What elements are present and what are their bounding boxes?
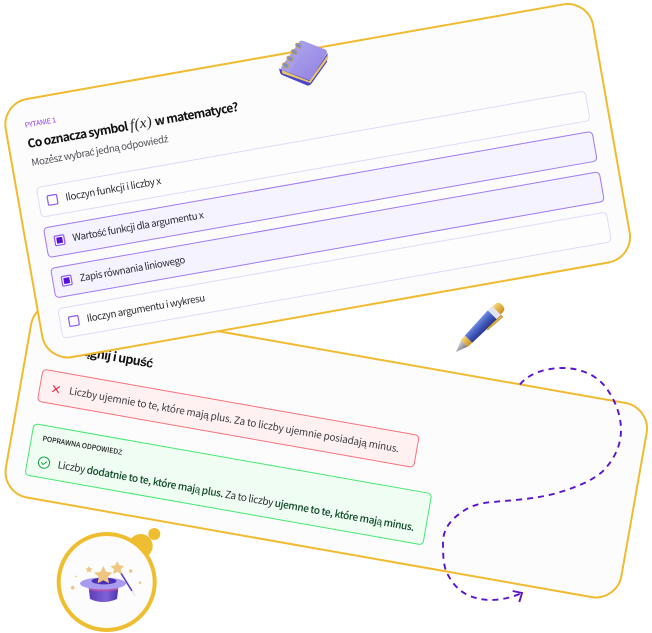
question title: Co oznacza symbol <box>26 117 130 152</box>
correct answer box <box>25 424 432 545</box>
icon: red cross <box>52 385 60 393</box>
correct answer label: POPRAWNA ODPOWIEDŹ <box>42 434 124 458</box>
correct answer text: Liczby dodatnie to te, które mają plus. Za to liczby ujemne to te, które mają minus. <box>57 456 416 534</box>
option 3 selected <box>51 172 604 298</box>
checkbox checked <box>54 235 65 246</box>
option 4 <box>58 212 611 338</box>
question title: f(x) <box>129 114 153 134</box>
question hint: Możesz wybrać jedną odpowiedź <box>30 131 170 169</box>
panel: question card <box>1 0 634 362</box>
option 2 selected <box>43 131 597 258</box>
checkbox empty <box>47 194 58 205</box>
option 1 text: Iloczyn funkcji i liczby x <box>64 173 162 204</box>
option 2 text: Wartość funkcji dla argumentu x <box>71 207 205 244</box>
question title: w matematyce? <box>153 98 240 130</box>
checkbox empty <box>68 315 79 327</box>
icon: hat and stars <box>71 561 141 602</box>
wrong answer text: Liczby ujemnie to te, które mają plus. Za to liczby ujemnie posiadają minus. <box>68 382 401 455</box>
icon: pen <box>451 300 509 358</box>
badge blob small <box>148 528 160 540</box>
icon: notebook <box>279 41 328 85</box>
option 3 text: Zapis równania liniowego <box>78 252 186 284</box>
badge ring <box>59 534 155 630</box>
dashed arrow path <box>443 368 621 602</box>
icon: check circle <box>38 456 50 469</box>
checkbox checked <box>61 275 72 286</box>
badge: magic hat <box>59 528 160 630</box>
wrong answer box <box>37 369 419 467</box>
badge blob large <box>129 534 153 558</box>
question label: PYTANIE 1 <box>24 115 57 131</box>
option 4 text: Iloczyn argumentu i wykresu <box>86 290 206 325</box>
panel: drag and drop card <box>1 299 651 602</box>
heading: drag and drop: Przeciągnij i upuść <box>49 336 155 372</box>
option 1 <box>36 91 590 217</box>
